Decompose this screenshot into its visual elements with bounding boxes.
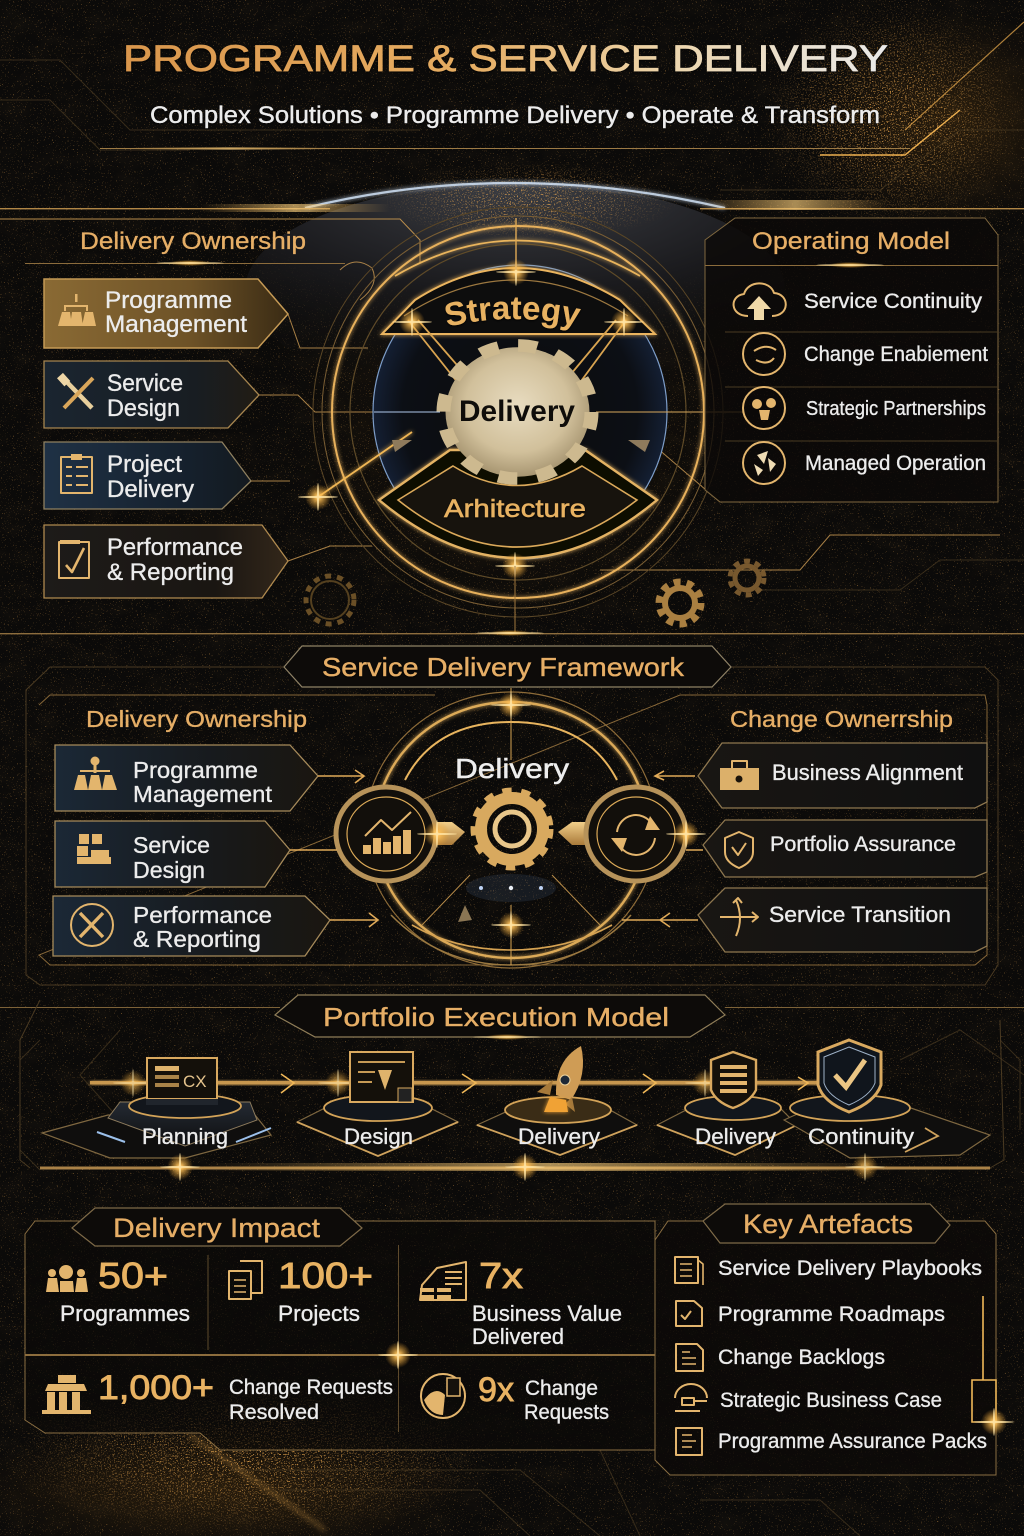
icon: org chart: [58, 294, 96, 326]
icon: cloud upload: [734, 283, 786, 320]
icon: backlog: [676, 1344, 703, 1371]
card: performance and reporting: [53, 896, 330, 956]
section: strategy hub: [0, 206, 1000, 632]
hub rings: [365, 688, 657, 968]
item: programme roadmaps: Programme Roadmaps: [718, 1302, 945, 1326]
icon: change circle: [743, 333, 785, 375]
item: service delivery playbooks: Service Delivery Playbooks: [718, 1256, 982, 1280]
lower glints: [458, 874, 556, 922]
stat: 50+ programmes: Programmes: [60, 1301, 190, 1326]
card: performance and reporting: Performance: [133, 902, 272, 928]
icon: rocket: [537, 1046, 583, 1112]
gear: framework: [475, 792, 549, 866]
accent lines: [298, 218, 705, 632]
step: planning: [42, 1058, 271, 1158]
icon: value documents: [420, 1262, 466, 1300]
pedestal: [784, 1095, 990, 1158]
stat: 100+ projects: Projects: [278, 1301, 360, 1326]
item: strategic partnerships: [743, 387, 986, 429]
item: strategic business case: Strategic Business Case: [720, 1388, 942, 1412]
flow line with arrows: [90, 1069, 830, 1097]
section divider: [0, 630, 1024, 636]
item: change enablement: Change Enabiement: [804, 343, 988, 366]
card: portfolio assurance: Portfolio Assurance: [770, 832, 956, 856]
stat: 1,000+ change requests: 1,000+: [98, 1369, 214, 1407]
icon: documents: [229, 1261, 262, 1299]
icon: monitor: CX: [183, 1072, 207, 1091]
strategy lens: Strategy: [446, 298, 581, 334]
planet horizon: [0, 110, 1024, 397]
icon: operation circle: [743, 442, 785, 484]
card: business alignment: [698, 743, 987, 808]
section: portfolio execution model: [0, 995, 1024, 1181]
stat: 50+ programmes: [46, 1255, 190, 1326]
heading: delivery impact: Delivery Impact: [113, 1213, 321, 1243]
framework frame: [26, 667, 998, 985]
gear: delivery: [444, 345, 592, 479]
step: planning: Planning: [142, 1124, 228, 1149]
icon: institution: [42, 1375, 91, 1414]
card: performance and reporting: Performance: [107, 534, 243, 561]
card: business alignment: Business Alignment: [772, 760, 963, 785]
section title: service delivery framework: Service Delivery Framework: [322, 652, 685, 682]
step: delivery shield: [657, 1052, 797, 1155]
step: delivery shield: Delivery: [695, 1124, 776, 1149]
card: performance and reporting: & Reporting: [133, 926, 261, 952]
panel: key artefacts: [655, 1204, 1014, 1475]
icon: tools circle: [71, 904, 113, 946]
icon: crossed tools: [57, 373, 93, 408]
title: PROGRAMME & SERVICE DELIVERY: [123, 38, 888, 79]
stat: 100+ projects: [229, 1255, 373, 1326]
glowing base line: [40, 1153, 990, 1181]
icon: clipboard: [61, 454, 92, 493]
decorative gears: [306, 561, 764, 624]
diagram: strategy delivery architecture hub: [298, 206, 724, 632]
panel: operating model: [705, 218, 998, 502]
item: change enablement: [743, 333, 988, 375]
heading: key artefacts: [703, 1204, 950, 1243]
stat: 100+ projects: 100+: [278, 1255, 373, 1296]
heading: delivery impact: [72, 1208, 362, 1246]
icon: shield check: [725, 832, 753, 868]
card: service transition: [698, 888, 987, 952]
icon: report with pen: [59, 542, 89, 578]
item: programme assurance packs: Programme Assurance Packs: [718, 1429, 987, 1453]
icon: business case: [675, 1384, 707, 1411]
stat: 50+ programmes: 50+: [98, 1255, 168, 1296]
gear: delivery: Delivery: [459, 395, 575, 428]
card: programme management: [55, 745, 318, 811]
icon: transition arrows: [720, 898, 758, 936]
connectors: [251, 262, 1000, 570]
stat: 9x change requests: [421, 1371, 609, 1424]
pedestal: [477, 1097, 637, 1155]
step: design: [297, 1052, 458, 1156]
icon: briefcase: [720, 761, 759, 790]
step: design: Design: [344, 1124, 413, 1149]
card: project delivery: Project: [107, 451, 182, 478]
strategy lens: [378, 236, 659, 380]
card: programme management: Management: [105, 311, 247, 338]
icon: monitor: [146, 1058, 218, 1105]
dial: cycle: [586, 787, 686, 881]
accent circuit: [972, 1296, 1014, 1436]
central disk: [373, 265, 667, 559]
stat: 7x business value: Delivered: [472, 1324, 564, 1349]
card: service design: [44, 361, 259, 428]
step: delivery rocket: Delivery: [518, 1124, 600, 1149]
icon: building blocks: [77, 834, 111, 864]
card: project delivery: Delivery: [107, 476, 194, 503]
stat: 1,000+ change requests: Change Requests: [229, 1376, 393, 1399]
heading: key artefacts: Key Artefacts: [743, 1209, 913, 1239]
heading: operating model: Operating Model: [752, 228, 950, 255]
section title: portfolio execution model: [275, 995, 725, 1040]
icon: screen: [350, 1052, 413, 1102]
card: service transition: Service Transition: [769, 902, 951, 927]
card: programme management: Management: [133, 781, 272, 807]
stat: 9x change requests: Change: [525, 1377, 598, 1400]
card: performance and reporting: & Reporting: [107, 559, 234, 586]
hub rings: [313, 207, 723, 617]
pedestal stage frame: [20, 1000, 1004, 1168]
item: service continuity: Service Continuity: [804, 290, 983, 313]
card: project delivery: [44, 442, 251, 509]
step: continuity: Continuity: [808, 1124, 914, 1149]
stat: 7x business value: [420, 1255, 622, 1349]
card: programme management: Programme: [133, 757, 258, 783]
dividers: [25, 1245, 655, 1432]
dial: chart: [336, 787, 436, 881]
item: managed operation: Managed Operation: [805, 452, 986, 475]
stat: 9x change requests: Requests: [524, 1401, 609, 1424]
label: delivery: Delivery: [455, 753, 569, 784]
icon: roadmap: [676, 1301, 702, 1326]
card: programme management: [44, 279, 288, 348]
section title: portfolio execution model: Portfolio Execution Model: [323, 1002, 669, 1032]
panel: delivery impact: [25, 1208, 655, 1450]
heading: delivery ownership: Delivery Ownership: [86, 706, 307, 732]
card: service design: Service: [133, 832, 210, 858]
section rules: [0, 1007, 1024, 1008]
connector bars: [425, 822, 595, 845]
item: change backlogs: Change Backlogs: [718, 1345, 885, 1369]
icon: change globe: [421, 1374, 465, 1418]
icon: partnership circle: [743, 387, 785, 429]
panel: delivery ownership: [0, 219, 420, 598]
card: portfolio assurance: [703, 820, 987, 877]
icon: check shield: [818, 1040, 881, 1112]
heading: delivery ownership: Delivery Ownership: [80, 228, 306, 255]
section title: service delivery framework: [284, 646, 731, 687]
section: service delivery framework: [26, 646, 998, 985]
item: service continuity: [734, 283, 983, 320]
icon: list shield: [711, 1052, 756, 1108]
card: service design: Design: [107, 395, 180, 422]
stat: 7x business value: Business Value: [472, 1301, 622, 1326]
subtitle: Complex Solutions • Programme Delivery • Operate & Transform: [150, 102, 880, 129]
item: managed operation: [743, 442, 986, 484]
icon: org chart: [74, 756, 117, 790]
stat: 1,000+ change requests: Resolved: [229, 1401, 319, 1424]
card: service design: [55, 821, 290, 887]
icon: playbook: [675, 1257, 703, 1285]
pedestal: [42, 1094, 271, 1158]
stat: 7x business value: 7x: [479, 1255, 523, 1296]
icon: assurance pack: [676, 1428, 702, 1455]
item: strategic business case: [675, 1384, 942, 1412]
architecture segment: [379, 450, 657, 580]
icon: people: [46, 1265, 88, 1292]
card: service design: Design: [133, 857, 205, 883]
connector arrows: [290, 770, 703, 927]
diagram: delivery hub: [336, 688, 706, 968]
step: delivery rocket: [477, 1046, 637, 1155]
step: continuity: [784, 1040, 990, 1158]
card: service design: Service: [107, 370, 183, 397]
card: performance and reporting: [44, 525, 288, 598]
item: strategic partnerships: Strategic Partnerships: [806, 398, 986, 420]
stat: 1,000+ change requests: [42, 1369, 393, 1424]
architecture segment: Arhitecture: [444, 495, 586, 523]
stat: 9x change requests: 9x: [478, 1371, 514, 1409]
pedestal: [297, 1095, 458, 1156]
heading: change ownership: Change Ownerrship: [730, 706, 953, 732]
card: programme management: Programme: [105, 287, 232, 314]
pedestal: [657, 1096, 797, 1155]
